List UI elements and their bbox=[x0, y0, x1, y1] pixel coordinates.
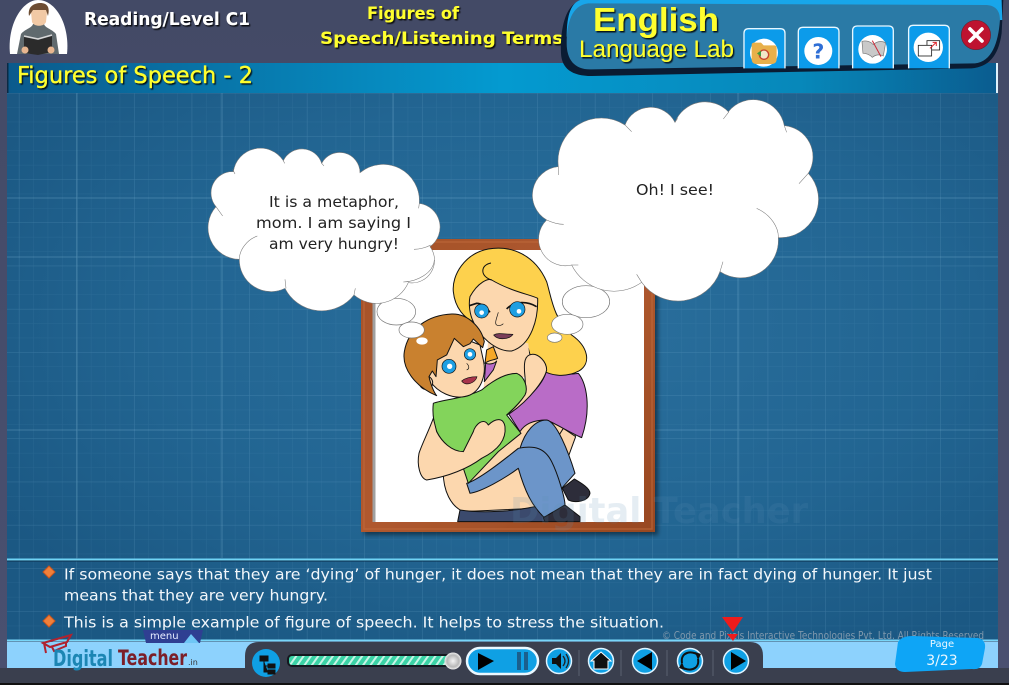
heading: Language Lab: Language Lab bbox=[579, 36, 734, 63]
logo: Digital Teacher: Teacher bbox=[118, 646, 187, 670]
icon: help tab bbox=[798, 27, 839, 68]
orange hair shadow bbox=[485, 347, 498, 363]
icon: bullet one bbox=[43, 566, 55, 578]
icon: home bbox=[588, 648, 614, 674]
divider line bbox=[7, 558, 998, 560]
mother's neck and chest bbox=[483, 335, 530, 390]
boy's jeans bbox=[467, 420, 575, 517]
illustration: mother and child bbox=[404, 248, 590, 522]
boy's hand and forearm bbox=[507, 354, 547, 415]
icon: help tab: ? bbox=[812, 39, 824, 63]
mother's shirt bbox=[508, 370, 587, 438]
icon: next bbox=[724, 648, 748, 674]
heading: topic: Figures of bbox=[367, 4, 460, 24]
boy's shirt bbox=[433, 373, 526, 483]
purple collar bbox=[484, 361, 497, 382]
icon: bullet two bbox=[43, 615, 55, 627]
icon: folder tab bbox=[744, 29, 785, 68]
page number badge: 3/23 bbox=[926, 653, 958, 669]
progress bar bbox=[287, 652, 462, 670]
icon: window tab bbox=[909, 25, 949, 68]
menu tab bbox=[143, 630, 203, 643]
watermark: Digital Teacher bbox=[510, 491, 808, 532]
boy's shoes bbox=[543, 479, 590, 522]
thought bubbles: child bbox=[377, 298, 428, 345]
mother's arm and hand bbox=[418, 418, 505, 480]
icon: tree menu bbox=[252, 649, 280, 677]
logo: Digital Teacher bbox=[43, 635, 198, 672]
logo: Digital Teacher: Digital bbox=[53, 647, 113, 672]
mother's torso and legs bbox=[443, 418, 577, 522]
slide title band bbox=[7, 63, 998, 93]
menu tab: menu bbox=[150, 631, 179, 642]
icon: speaker bbox=[546, 648, 572, 674]
speech cloud: mother: Oh! I see! bbox=[636, 181, 714, 199]
speech cloud: child: It is a metaphor, bbox=[269, 193, 399, 211]
icon: reload bbox=[678, 648, 702, 674]
arrow: red next indicator bbox=[722, 617, 743, 641]
speech cloud: child: am very hungry! bbox=[269, 235, 399, 253]
icon: close button bbox=[961, 20, 991, 50]
panel: English Language Lab toolbar bbox=[561, 0, 1003, 76]
page number badge bbox=[895, 636, 985, 672]
speech cloud: mother bbox=[532, 100, 819, 301]
icon: book tab bbox=[853, 26, 893, 68]
logo: Digital Teacher: .in bbox=[188, 658, 198, 667]
heading: reading level: Reading/Level C1 bbox=[84, 9, 250, 30]
boy's head bbox=[404, 314, 484, 397]
bottom footer bbox=[0, 640, 1009, 685]
text block: explanation bullets: means that they are very hungry. bbox=[64, 586, 328, 604]
heading: English: English bbox=[593, 1, 719, 38]
text block: explanation bullets: If someone says that they are ‘dying’ of hunger, it does not mean that they are in fact dying of hunger. It just bbox=[64, 566, 932, 584]
slide title band: Figures of Speech - 2 bbox=[17, 63, 253, 89]
heading: topic: Speech/Listening Terms bbox=[320, 29, 563, 49]
icon: student reading avatar bbox=[10, 0, 67, 55]
text block: explanation bullets bbox=[43, 566, 932, 632]
mother's hair bbox=[453, 248, 587, 375]
picture frame with mother and child bbox=[361, 239, 655, 532]
thought bubbles: mother bbox=[547, 286, 610, 342]
media controls panel bbox=[245, 642, 763, 677]
text block: explanation bullets: This is a simple example of figure of speech. It helps to stress the situation. bbox=[63, 614, 664, 632]
heading: topic bbox=[320, 4, 563, 49]
icon: previous bbox=[632, 648, 658, 674]
mother's face bbox=[469, 263, 538, 351]
page number badge: Page bbox=[930, 639, 954, 650]
speech cloud: child bbox=[208, 148, 440, 311]
play and pause control bbox=[467, 648, 538, 674]
speech cloud: child: mom. I am saying I bbox=[256, 214, 411, 232]
